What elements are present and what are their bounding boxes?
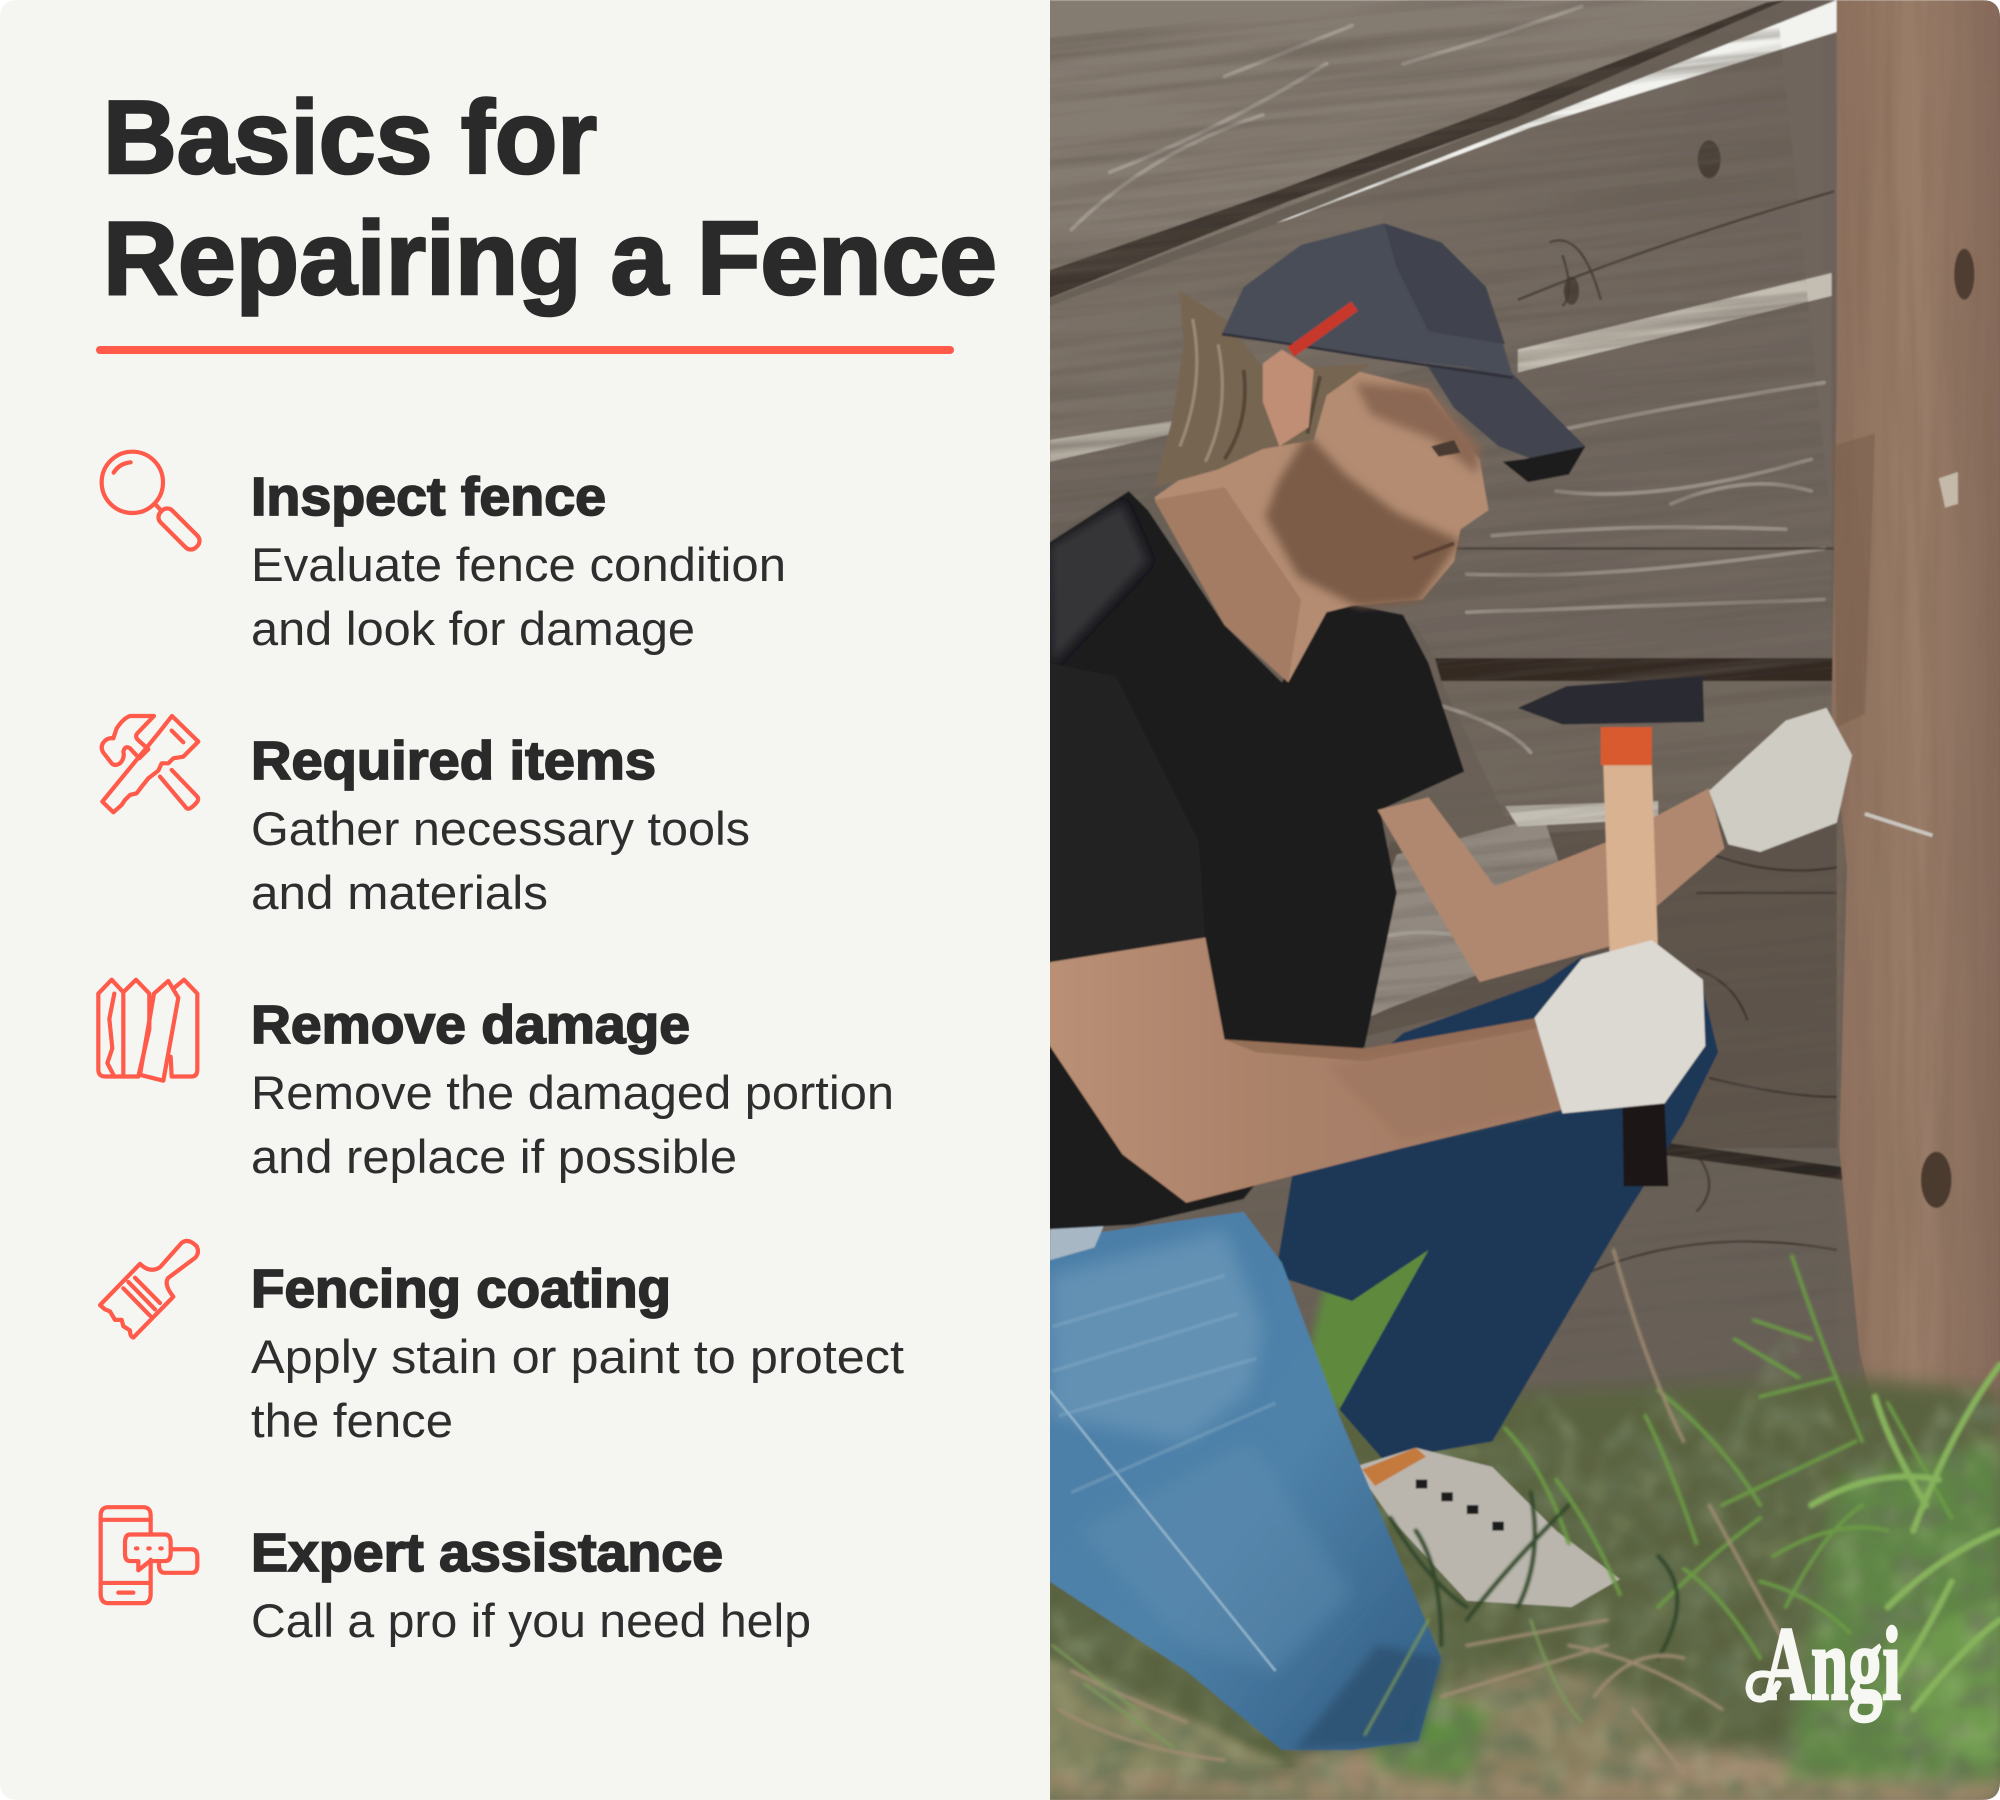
description: fencing coating: the fence — [251, 1394, 453, 1447]
icon: damaged fence — [98, 980, 197, 1081]
description: fencing coating — [251, 1330, 904, 1447]
description: fencing coating: Apply stain or paint to protect — [251, 1330, 904, 1383]
heading: expert assistance: Expert assistance — [251, 1523, 723, 1583]
icon: magnifying glass — [102, 452, 203, 553]
grass mottled texture — [1050, 1327, 2000, 1800]
heading: remove damage: Remove damage — [251, 995, 690, 1055]
list item: required items — [102, 716, 750, 919]
shoe — [1355, 1448, 1620, 1607]
list item: inspect fence — [102, 452, 786, 655]
icon: paint brush — [100, 1241, 198, 1338]
logo: Angi — [1749, 1605, 1901, 1722]
title — [103, 80, 997, 317]
far arm — [1378, 788, 1724, 982]
heading: inspect fence: Inspect fence — [251, 467, 606, 527]
description: expert assistance: Call a pro if you need help — [251, 1594, 811, 1647]
title: Basics for — [103, 80, 597, 196]
list item: fencing coating — [100, 1241, 904, 1447]
logo: Angi: Angi — [1762, 1605, 1901, 1722]
panel: text background — [0, 0, 1052, 1800]
neck and face — [1154, 370, 1489, 682]
ear — [1263, 349, 1314, 446]
hair — [1154, 291, 1371, 487]
description: inspect fence: and look for damage — [251, 602, 695, 655]
description: remove damage: and replace if possible — [251, 1130, 737, 1183]
jeans: far leg — [1276, 957, 1718, 1460]
title underline — [96, 346, 954, 354]
description: inspect fence — [251, 538, 786, 655]
near arm — [1020, 937, 1562, 1203]
hammer — [1518, 676, 1704, 1186]
icon: hammer and saw — [102, 716, 198, 812]
photo: man hammering a wooden fence — [985, 0, 2000, 1800]
description: remove damage — [251, 1066, 894, 1183]
pencil behind ear — [1291, 306, 1355, 352]
description: inspect fence: Evaluate fence condition — [251, 538, 786, 591]
title: Repairing a Fence — [103, 201, 997, 317]
grass blades — [1052, 1250, 2000, 1773]
fence grain texture — [1050, 0, 1842, 1250]
fence planks — [1020, 0, 2000, 1800]
list item: remove damage — [98, 980, 894, 1183]
description: remove damage: Remove the damaged portion — [251, 1066, 894, 1119]
wood highlights — [1071, 6, 1824, 944]
heading: required items: Required items — [251, 731, 656, 791]
grass and ground — [1020, 1244, 2000, 1800]
black t-shirt — [1020, 491, 1464, 1231]
description: required items — [251, 802, 750, 919]
description: required items: and materials — [251, 866, 548, 919]
jeans: near leg — [1020, 1212, 1441, 1750]
baseball cap — [1222, 223, 1585, 482]
near hand glove — [1534, 940, 1705, 1114]
list item: expert assistance — [101, 1507, 811, 1647]
icon: phone with chat bubbles — [101, 1507, 197, 1603]
description: required items: Gather necessary tools — [251, 802, 750, 855]
heading: fencing coating: Fencing coating — [251, 1259, 671, 1319]
far hand glove — [1709, 708, 1852, 852]
wooden post — [1832, 0, 2000, 1467]
